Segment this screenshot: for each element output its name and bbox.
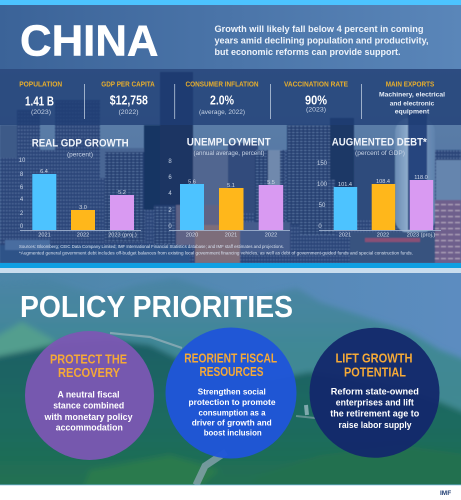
chart: unemployment: 2020 bbox=[186, 232, 198, 238]
panel: lift growth potential: Reform state-owned bbox=[331, 387, 419, 397]
chart: unemployment: 5.1 bbox=[227, 183, 235, 189]
stat: gdp per capita: GDP PER CAPITA bbox=[101, 80, 155, 89]
chart: real GDP growth: 3.0 bbox=[79, 205, 87, 211]
panel: lift growth potential bbox=[310, 328, 440, 458]
panel: protect the recovery: accommodation bbox=[56, 423, 123, 433]
stat: vaccination rate: VACCINATION RATE bbox=[284, 80, 348, 89]
chart: unemployment: 2 bbox=[168, 208, 172, 214]
header band bbox=[0, 5, 461, 69]
stats row bbox=[19, 80, 445, 116]
chart: unemployment: 0 bbox=[168, 224, 172, 230]
chart: augmented debt: 150 bbox=[317, 161, 328, 167]
stat: gdp per capita: $12,758 bbox=[110, 94, 148, 108]
intro text: years amid declining population and productivity, bbox=[214, 36, 429, 46]
stat: consumer inflation: 2.0% bbox=[210, 94, 234, 108]
sources note bbox=[19, 244, 413, 256]
stat band overlay bbox=[0, 69, 461, 125]
chart: augmented debt: (percent of GDP) bbox=[355, 151, 405, 157]
dark foreground bbox=[0, 340, 461, 495]
chart: unemployment: 2021 bbox=[225, 232, 237, 238]
chart: unemployment: 2022 bbox=[265, 232, 277, 238]
intro text: Growth will likely fall below 4 percent in coming bbox=[214, 24, 424, 35]
panel: reorient fiscal resources: consumption as a bbox=[198, 407, 266, 417]
dark central tower bbox=[144, 125, 176, 210]
chart: real GDP growth: 8 bbox=[20, 172, 24, 178]
section divider bars bbox=[0, 263, 461, 268]
panel: reorient fiscal resources bbox=[166, 328, 296, 458]
chart: unemployment: 8 bbox=[168, 159, 172, 165]
stat: main exports: Machinery, electrical bbox=[379, 92, 445, 99]
panel: lift growth potential: raise labor supply bbox=[338, 420, 412, 430]
heading: policy priorities: POLICY PRIORITIES bbox=[20, 289, 293, 324]
city skyline background bbox=[0, 69, 461, 263]
stat: main exports bbox=[379, 80, 445, 116]
chart: augmented debt: 100 bbox=[317, 182, 328, 188]
chart: real GDP growth: 6 bbox=[20, 185, 24, 191]
chart title: REAL GDP GROWTH bbox=[32, 138, 129, 150]
chart: unemployment: (annual average, percent) bbox=[194, 151, 264, 157]
stat: vaccination rate bbox=[284, 80, 348, 114]
chart: augmented debt: 101.4 bbox=[338, 182, 352, 188]
logo: IMF: IMF bbox=[440, 490, 451, 497]
chart: real GDP growth: 2021 bbox=[38, 232, 51, 238]
chart title: UNEMPLOYMENT bbox=[187, 137, 271, 149]
chart: real GDP growth: 5.2 bbox=[118, 190, 126, 196]
stat: population bbox=[19, 80, 62, 116]
panel: reorient fiscal resources: driver of growth and bbox=[192, 417, 272, 427]
panel: reorient fiscal resources: REORIENT FISCAL bbox=[184, 352, 277, 366]
panel: protect the recovery: stance combined bbox=[53, 401, 124, 411]
chart: unemployment: 4 bbox=[168, 191, 172, 197]
chart: real GDP growth: 6.4 bbox=[40, 169, 48, 175]
stat: consumer inflation: (average, 2022) bbox=[199, 109, 245, 116]
chart title: AUGMENTED DEBT* bbox=[332, 137, 428, 149]
panel: protect the recovery: A neutral fiscal bbox=[58, 389, 120, 399]
chart: real GDP growth: 2022 bbox=[77, 232, 89, 238]
stat: main exports: and electronic bbox=[390, 100, 434, 107]
stat: vaccination rate: (2023) bbox=[306, 106, 326, 114]
top accent bar bbox=[0, 0, 461, 5]
base city mass bbox=[0, 150, 461, 263]
stat: population: (2023) bbox=[31, 109, 51, 116]
low right bbox=[350, 232, 435, 263]
panel: reorient fiscal resources: protection to promote bbox=[188, 397, 276, 407]
rounded tower bbox=[395, 118, 435, 233]
chart: augmented debt: 50 bbox=[319, 203, 326, 209]
pink building bbox=[435, 200, 461, 263]
sources note: Sources: Bloomberg; CEIC Data Company Limited; IMF International Financial Statistics database; and IMF staff estimates and projections. bbox=[19, 244, 284, 249]
stat: population: POPULATION bbox=[19, 80, 62, 89]
stat: main exports: equipment bbox=[395, 108, 430, 116]
stat: gdp per capita bbox=[101, 80, 155, 116]
chart: augmented debt: 0 bbox=[318, 224, 322, 230]
chart: unemployment: 5.6 bbox=[188, 180, 196, 186]
panel: protect the recovery bbox=[25, 331, 154, 460]
chart: real GDP growth: 0 bbox=[20, 224, 24, 230]
chart: real GDP growth: 10 bbox=[19, 158, 26, 164]
chart: real GDP growth bbox=[19, 138, 141, 238]
warm low buildings bbox=[176, 205, 236, 245]
panel: protect the recovery: PROTECT THE bbox=[50, 353, 127, 367]
light hill left bbox=[0, 322, 70, 365]
panel: reorient fiscal resources: boost inclusion bbox=[204, 427, 262, 437]
chart: augmented debt: 108.4 bbox=[376, 179, 390, 185]
far ridges bbox=[0, 278, 461, 495]
stat: vaccination rate: 90% bbox=[305, 94, 327, 108]
panel: protect the recovery: RECOVERY bbox=[58, 366, 121, 380]
chart: unemployment bbox=[168, 137, 290, 238]
stat: consumer inflation bbox=[186, 80, 258, 116]
panel: protect the recovery: with monetary policy bbox=[43, 412, 133, 422]
footer band bbox=[0, 485, 461, 500]
stat: population: 1.41 B bbox=[25, 95, 54, 109]
stat: consumer inflation: CONSUMER INFLATION bbox=[186, 80, 258, 89]
intro text bbox=[214, 24, 429, 58]
panel: lift growth potential: the retirement age to bbox=[330, 409, 420, 419]
mountain background bbox=[0, 273, 461, 495]
sources note: *Augmented general government debt includes off-budget balances from existing local government financing vehicles, as well as debt of government-guided funds and special construction funds. bbox=[19, 250, 413, 256]
panel: reorient fiscal resources: RESOURCES bbox=[200, 365, 264, 379]
chart: unemployment: 5.5 bbox=[267, 180, 275, 186]
title: CHINA: CHINA bbox=[20, 16, 158, 66]
chart: augmented debt bbox=[317, 137, 441, 238]
chart: augmented debt: 2022 bbox=[377, 232, 389, 238]
stat: main exports: MAIN EXPORTS bbox=[386, 80, 434, 89]
winding wall bbox=[110, 333, 182, 348]
panel: lift growth potential: enterprises and lift bbox=[336, 398, 414, 408]
chart: unemployment: 6 bbox=[168, 175, 172, 181]
chart: real GDP growth: (percent) bbox=[67, 152, 93, 158]
chart: real GDP growth: 2023 (proj.) bbox=[108, 232, 137, 238]
panel: lift growth potential: LIFT GROWTH bbox=[336, 352, 412, 366]
chart: real GDP growth: 4 bbox=[20, 197, 24, 203]
chart: real GDP growth: 2 bbox=[20, 211, 24, 217]
stat: gdp per capita: (2022) bbox=[118, 109, 138, 116]
chart: augmented debt: 2023 (proj.) bbox=[407, 232, 435, 238]
chart: augmented debt: 118.0 bbox=[414, 175, 428, 181]
chart: augmented debt: 2021 bbox=[339, 232, 351, 238]
panel: lift growth potential: POTENTIAL bbox=[344, 365, 406, 379]
panel: reorient fiscal resources: Strengthen social bbox=[198, 387, 266, 397]
intro text: but economic reforms can provide support. bbox=[214, 47, 400, 58]
